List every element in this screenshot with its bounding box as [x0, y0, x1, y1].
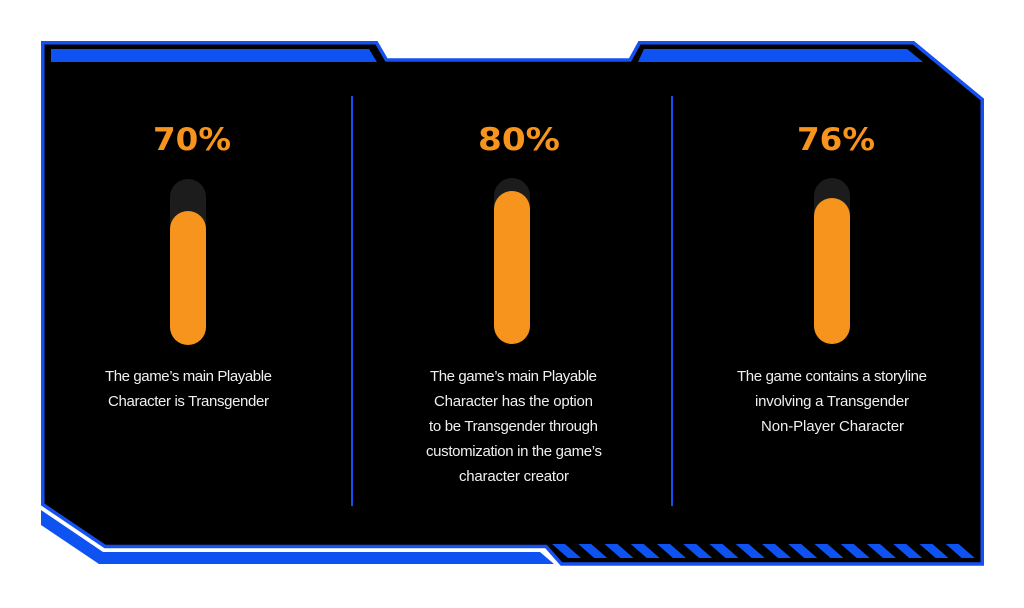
description 3: [737, 368, 927, 435]
description 2: [426, 368, 602, 485]
top left accent bar: [51, 49, 377, 62]
percentage 70%: 70%: [153, 122, 231, 158]
description 3: The game contains a storyline: [737, 368, 927, 385]
description 2: character creator: [459, 468, 569, 485]
progress bar 80%: [494, 178, 530, 344]
progress bar 70%: [170, 179, 206, 345]
description 3: involving a Transgender: [755, 393, 909, 410]
description 3: Non-Player Character: [761, 418, 904, 435]
description 1: The game’s main Playable: [105, 368, 272, 385]
divider left: [351, 96, 353, 506]
description 2: The game’s main Playable: [430, 368, 597, 385]
percentage 76%: 76%: [797, 122, 875, 158]
panel: main frame: [43, 43, 982, 564]
divider right: [671, 96, 673, 506]
description 2: customization in the game’s: [426, 443, 602, 460]
percentage 80%: 80%: [478, 122, 560, 158]
description 1: [105, 368, 272, 410]
panel: column 3: [737, 122, 927, 435]
bottom right hazard stripes: [552, 544, 975, 558]
top right accent bar: [638, 49, 923, 62]
description 2: Character has the option: [434, 393, 593, 410]
bottom left accent band: [41, 510, 554, 564]
progress bar 76%: [814, 178, 850, 344]
panel: column 1: [105, 122, 272, 410]
panel: column 2: [426, 122, 602, 485]
description 1: Character is Transgender: [108, 393, 269, 410]
description 2: to be Transgender through: [429, 418, 598, 435]
